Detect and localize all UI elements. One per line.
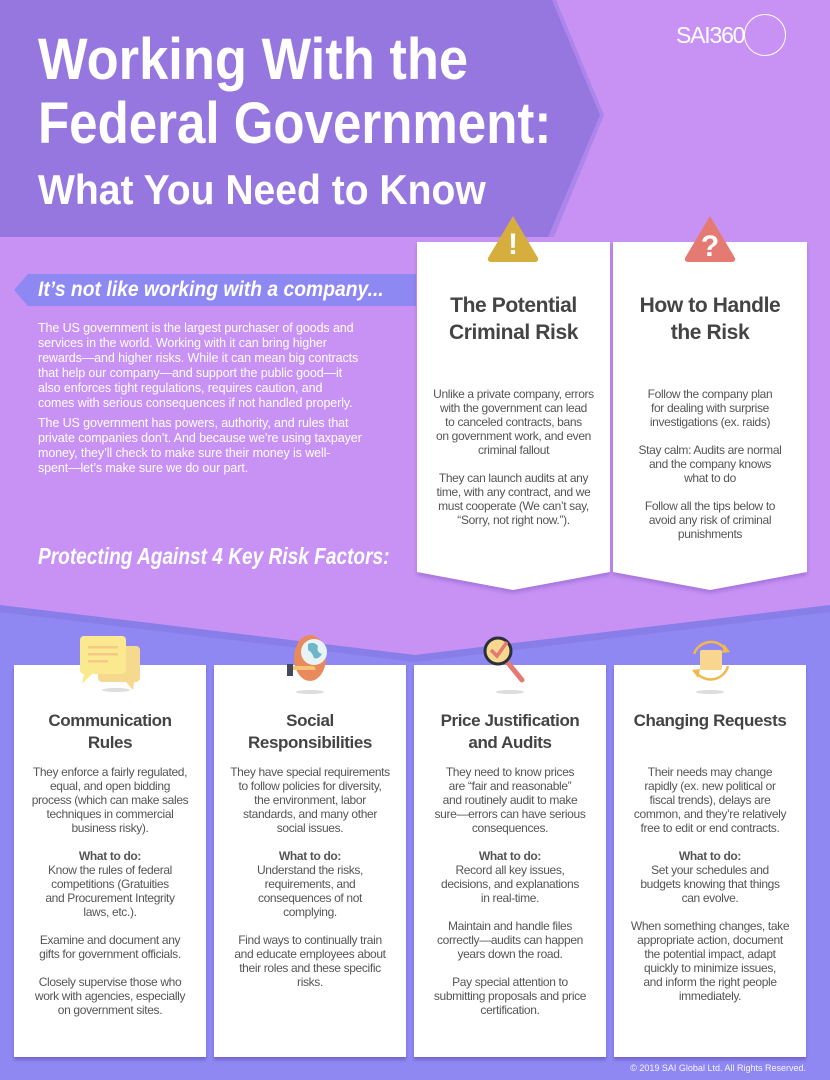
text: Unlike a private company, errors [433,387,594,401]
heading [441,711,579,752]
text: rapidly (ex. new political or [644,779,776,793]
icon: question [684,216,736,263]
heading: The Potential [450,294,577,317]
icon: globe hand [287,635,327,694]
heading: Changing Requests [634,711,786,730]
text: submitting proposals and price [434,989,586,1003]
icon: magnifier [484,636,524,694]
text: complying. [283,905,337,919]
text: gifts for government officials. [39,947,181,961]
text: They have special requirements [230,765,390,779]
text: business risky). [71,821,149,835]
icon: question: ? [701,230,719,263]
text: investigations (ex. raids) [650,415,770,429]
heading: Social [286,711,334,730]
text: to follow policies for diversity, [239,779,381,793]
text: They enforce a fairly regulated, [33,765,187,779]
text: Stay calm: Audits are normal [639,443,781,457]
text: the potential impact, adapt [644,947,776,961]
text: and routinely audit to make [443,793,577,807]
text: equal, and open bidding [50,779,170,793]
text: They can launch audits at any [439,471,588,485]
text: what to do [684,471,736,485]
text: certification. [480,1003,540,1017]
text: “Sorry, not right now.”). [457,513,570,527]
text: laws, etc.). [83,905,137,919]
text: quickly to minimize issues, [644,961,776,975]
text: sure—errors can have serious [435,807,585,821]
text: avoid any risk of criminal [649,513,771,527]
text: social issues. [277,821,343,835]
text: and inform the right people [643,975,777,989]
intro text: comes with serious consequences if not handled properly. [38,396,352,410]
icon: warning [488,216,538,262]
intro text: that help our company—and support the public good—it [38,366,342,380]
intro text: money, they’ll check to make sure their money is well- [38,446,330,460]
heading: Rules [88,733,132,752]
text: Their needs may change [648,765,772,779]
text: Follow all the tips below to [645,499,775,513]
text: What to do: [279,849,341,863]
banner: intro heading: It’s not like working with a company... [38,278,384,301]
text: work with agencies, especially [35,989,185,1003]
title: Working With the [38,27,468,92]
text: with the government can lead [440,401,587,415]
text: Understand the risks, [257,863,363,877]
text: the environment, labor [254,793,366,807]
text: years down the road. [457,947,563,961]
text: What to do: [79,849,141,863]
intro text: private companies don’t. And because we’re using taxpayer [38,431,362,445]
title: Federal Government: [38,91,551,156]
heading [640,294,780,344]
logo: SAI360 [676,22,744,48]
text: When something changes, take [631,919,789,933]
text: Follow the company plan [648,387,772,401]
text: correctly—audits can happen [437,933,583,947]
text [639,387,781,541]
text: can evolve. [682,891,738,905]
text: and Procurement Integrity [45,891,175,905]
text: budgets knowing that things [640,877,780,891]
text: standards, and many other [243,807,377,821]
text [32,765,188,1017]
text: to canceled contracts, bans [445,415,582,429]
text: must cooperate (We can’t say, [438,499,589,513]
text: Maintain and handle files [448,919,572,933]
text: process (which can make sales [32,793,188,807]
card: social responsibilities [214,665,406,1057]
text: risks. [297,975,323,989]
text: appropriate action, document [637,933,783,947]
text: Examine and document any [40,933,180,947]
intro text: also enforces tight regulations, requires caution, and [38,381,322,395]
heading [248,711,372,752]
text: time, with any contract, and we [437,485,590,499]
heading: the Risk [671,321,749,344]
text [434,765,586,1017]
text [631,765,789,1003]
heading [449,294,578,344]
panel: handle risk [612,242,808,594]
text: Closely supervise those who [39,975,181,989]
intro text: spent—let’s make sure we do our part. [38,461,248,475]
card: communication rules [14,665,206,1057]
text: Find ways to continually train [238,933,382,947]
icon: warning: ! [508,228,518,261]
text: for dealing with surprise [651,401,769,415]
heading: Communication [48,711,172,730]
text: criminal fallout [478,443,549,457]
text: Record all key issues, [455,863,564,877]
text: consequences of not [258,891,362,905]
text: in real-time. [481,891,539,905]
text: fiscal trends), delays are [650,793,770,807]
text: requirements, and [265,877,355,891]
icon: cycle [692,640,730,694]
text: and educate employees about [234,947,386,961]
panel: criminal risk [416,242,612,594]
icon: chat [80,636,140,692]
text: What to do: [479,849,541,863]
title: What You Need to Know [38,166,486,213]
text: Know the rules of federal [48,863,172,877]
heading: Price Justification [441,711,579,730]
heading: and Audits [468,733,552,752]
intro text: The US government has powers, authority, and rules that [38,416,348,430]
heading [48,711,172,752]
intro text [38,321,362,475]
text: techniques in commercial [46,807,174,821]
text: and the company knows [649,457,771,471]
subheading: risk factors: Protecting Against 4 Key Risk Factors: [38,543,389,569]
heading: Criminal Risk [449,321,578,344]
intro text: The US government is the largest purchaser of goods and [38,321,354,335]
footer: © 2019 SAI Global Ltd. All Rights Reserved. [630,1063,806,1073]
heading: How to Handle [640,294,780,317]
text: competitions (Gratuities [51,877,169,891]
banner: intro heading [14,274,416,306]
text [433,387,594,527]
text: decisions, and explanations [441,877,579,891]
text: They need to know prices [446,765,574,779]
text: What to do: [679,849,741,863]
text: on government work, and even [436,429,591,443]
heading: Responsibilities [248,733,372,752]
text: consequences. [472,821,548,835]
text: Pay special attention to [452,975,568,989]
text: are “fair and reasonable” [449,779,571,793]
text: common, and they’re relatively [634,807,786,821]
title [38,27,551,213]
card: changing requests [614,665,806,1057]
card: price justification [414,665,606,1057]
text: free to edit or end contracts. [641,821,779,835]
text: on government sites. [58,1003,162,1017]
text: Set your schedules and [651,863,769,877]
logo [676,14,786,56]
text: punishments [678,527,742,541]
text [230,765,390,989]
text: immediately. [679,989,741,1003]
intro text: rewards—and higher risks. While it can mean big contracts [38,351,358,365]
text: their roles and these specific [239,961,381,975]
intro text: services in the world. Working with it can bring higher [38,336,327,350]
